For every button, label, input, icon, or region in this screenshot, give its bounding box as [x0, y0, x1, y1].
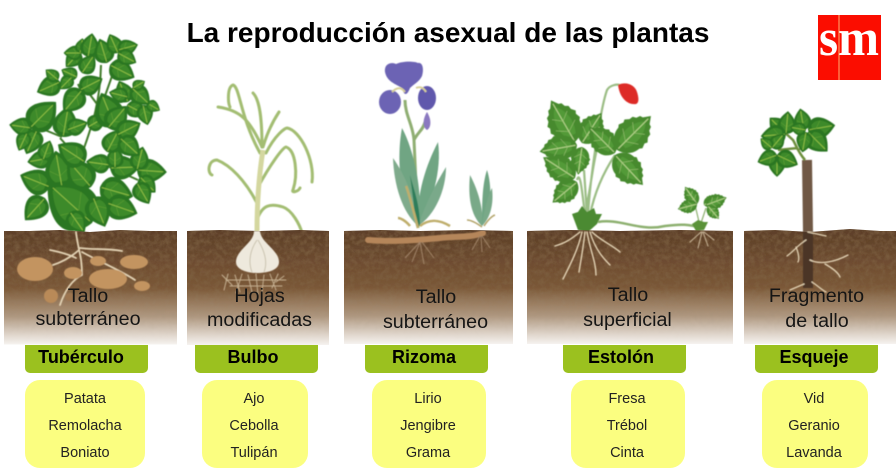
examples: Ajo [244, 391, 264, 407]
panel: tubérculo [4, 31, 177, 468]
panel: rizoma [344, 62, 513, 468]
header [755, 345, 878, 373]
title: La reproducción asexual de las plantas [187, 17, 709, 48]
plant: fresa [536, 83, 729, 232]
examples: Remolacha [48, 418, 123, 434]
examples [202, 380, 308, 468]
soil label: subterráneo [35, 308, 141, 330]
roots and tubers [17, 232, 150, 305]
examples: Trébol [607, 418, 647, 434]
soil label: Hojas [234, 285, 285, 307]
examples: Boniato [60, 445, 110, 461]
examples: Vid [804, 391, 824, 407]
plant: vid [755, 107, 837, 232]
examples [372, 380, 486, 468]
examples: Cinta [610, 445, 645, 461]
header: Tubérculo [38, 347, 124, 367]
stem fragment and roots [787, 232, 848, 292]
soil [4, 230, 177, 344]
logo: sm: sm [819, 10, 879, 67]
header: Rizoma [392, 347, 457, 367]
soil label: de tallo [785, 310, 849, 332]
soil [744, 229, 896, 344]
examples: Tulipán [230, 445, 278, 461]
soil [527, 230, 733, 344]
header [563, 345, 686, 373]
examples: Cebolla [229, 418, 280, 434]
garlic bulb and roots [222, 231, 286, 295]
panel: esqueje [744, 107, 896, 468]
examples: Fresa [608, 391, 646, 407]
plant: patata [8, 31, 168, 241]
examples: Lirio [414, 391, 442, 407]
plant: lirio [379, 62, 495, 228]
examples: Lavanda [786, 445, 843, 461]
examples [762, 380, 868, 468]
soil label: Fragmento [769, 285, 864, 307]
examples [25, 380, 145, 468]
soil label: Tallo [68, 285, 108, 307]
panel: bulbo [187, 85, 329, 468]
roots [555, 232, 714, 279]
soil label: Tallo [608, 284, 648, 306]
rhizome and roots [368, 233, 490, 264]
header [365, 345, 488, 373]
soil label: Tallo [416, 286, 456, 308]
soil [187, 230, 329, 345]
examples [571, 380, 685, 468]
soil label: superficial [583, 309, 672, 331]
examples: Geranio [788, 418, 840, 434]
examples: Jengibre [400, 418, 456, 434]
plant: ajo [209, 85, 312, 233]
soil label: modificadas [207, 309, 312, 331]
header [195, 345, 318, 373]
header: Esqueje [779, 347, 849, 367]
examples: Patata [64, 391, 107, 407]
header [25, 345, 148, 373]
header: Estolón [588, 347, 654, 367]
panel: estolón [527, 83, 733, 468]
examples: Grama [406, 445, 451, 461]
soil [344, 230, 513, 344]
soil label: subterráneo [383, 311, 488, 333]
header: Bulbo [228, 347, 278, 367]
